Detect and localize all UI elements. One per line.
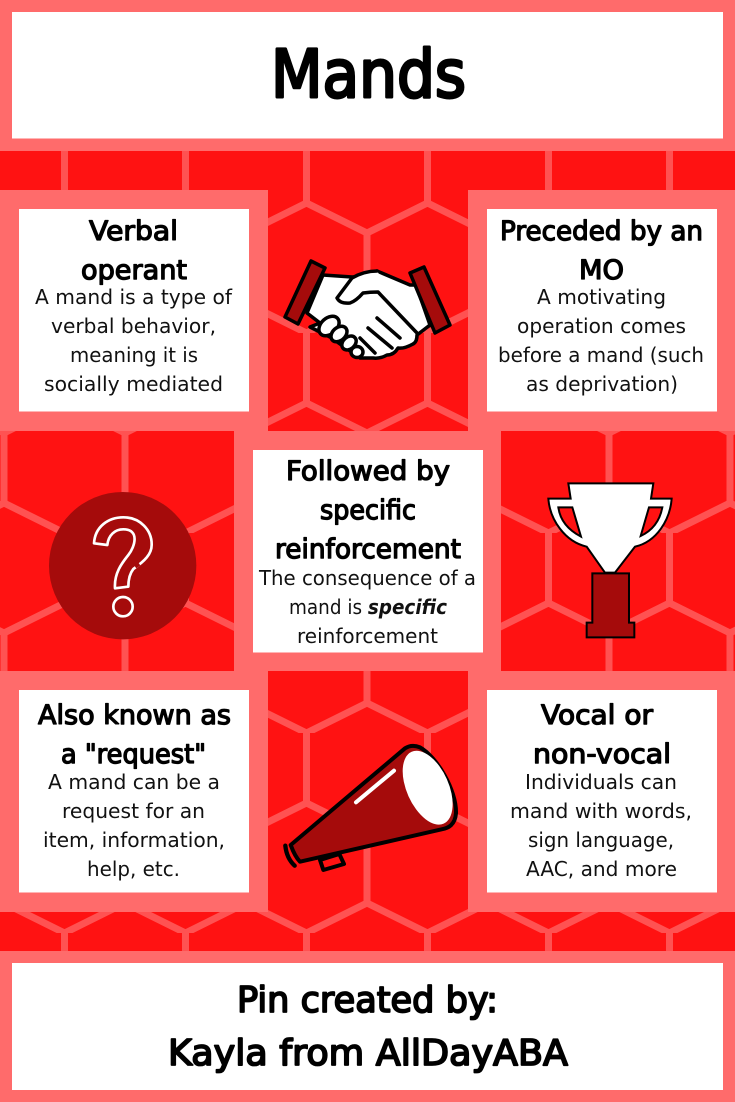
panel: followed by specific reinforcement: Followed by — [286, 456, 450, 487]
icon: question mark — [49, 492, 196, 639]
panel: preceded by an MO — [468, 190, 735, 431]
credit line 1: Pin created by: — [237, 980, 498, 1021]
panel: preceded by an MO: MO — [579, 255, 624, 286]
panel: vocal or non-vocal: Vocal or — [541, 700, 654, 731]
panel: also known as a request: item, information, — [43, 828, 225, 852]
title panel — [12, 12, 723, 138]
panel: verbal operant: Verbal — [89, 216, 178, 247]
panel: preceded by an MO: before a mand (such — [498, 343, 704, 367]
panel: also known as a request: a "request" — [61, 739, 206, 770]
panel: verbal operant — [0, 190, 268, 431]
hexagon background band — [0, 151, 735, 951]
panel: vocal or non-vocal: non-vocal — [533, 739, 671, 770]
icon: trophy — [548, 483, 672, 637]
panel: vocal or non-vocal: mand with words, — [510, 799, 692, 823]
panel: also known as a request: Also known as — [38, 700, 231, 731]
panel: also known as a request: request for an — [62, 799, 205, 823]
credit line 2: Kayla from AllDayABA — [168, 1033, 568, 1074]
panel: followed by specific reinforcement — [234, 431, 501, 671]
title: Mands — [271, 36, 466, 113]
panel: followed by specific reinforcement: specific — [320, 495, 416, 526]
panel: vocal or non-vocal: sign language, — [528, 828, 674, 852]
panel: verbal operant: operant — [81, 255, 187, 286]
panel: followed by specific reinforcement: reinforcement — [275, 534, 461, 565]
panel: followed by specific reinforcement: mand is specific — [289, 595, 447, 619]
panel: verbal operant: verbal behavior, — [51, 314, 216, 338]
panel: followed by specific reinforcement: The consequence of a — [258, 566, 476, 590]
panel: preceded by an MO: A motivating — [537, 285, 666, 309]
panel: also known as a request: A mand can be a — [48, 770, 220, 794]
footer panel — [12, 963, 723, 1090]
panel: vocal or non-vocal: AAC, and more — [526, 857, 677, 881]
panel: verbal operant: meaning it is — [70, 343, 198, 367]
panel: preceded by an MO: operation comes — [517, 314, 686, 338]
panel: also known as a request: help, etc. — [87, 857, 180, 881]
panel: verbal operant: socially mediated — [44, 372, 223, 396]
panel: preceded by an MO: Preceded by an — [500, 216, 703, 247]
panel: followed by specific reinforcement: reinforcement — [297, 624, 438, 648]
panel: preceded by an MO: as deprivation) — [526, 372, 678, 396]
panel: verbal operant: A mand is a type of — [35, 285, 233, 309]
panel: vocal or non-vocal — [468, 671, 735, 912]
icon: megaphone — [285, 743, 463, 870]
icon: handshake — [285, 261, 450, 358]
panel: vocal or non-vocal: Individuals can — [525, 770, 677, 794]
panel: also known as a request — [0, 671, 268, 912]
